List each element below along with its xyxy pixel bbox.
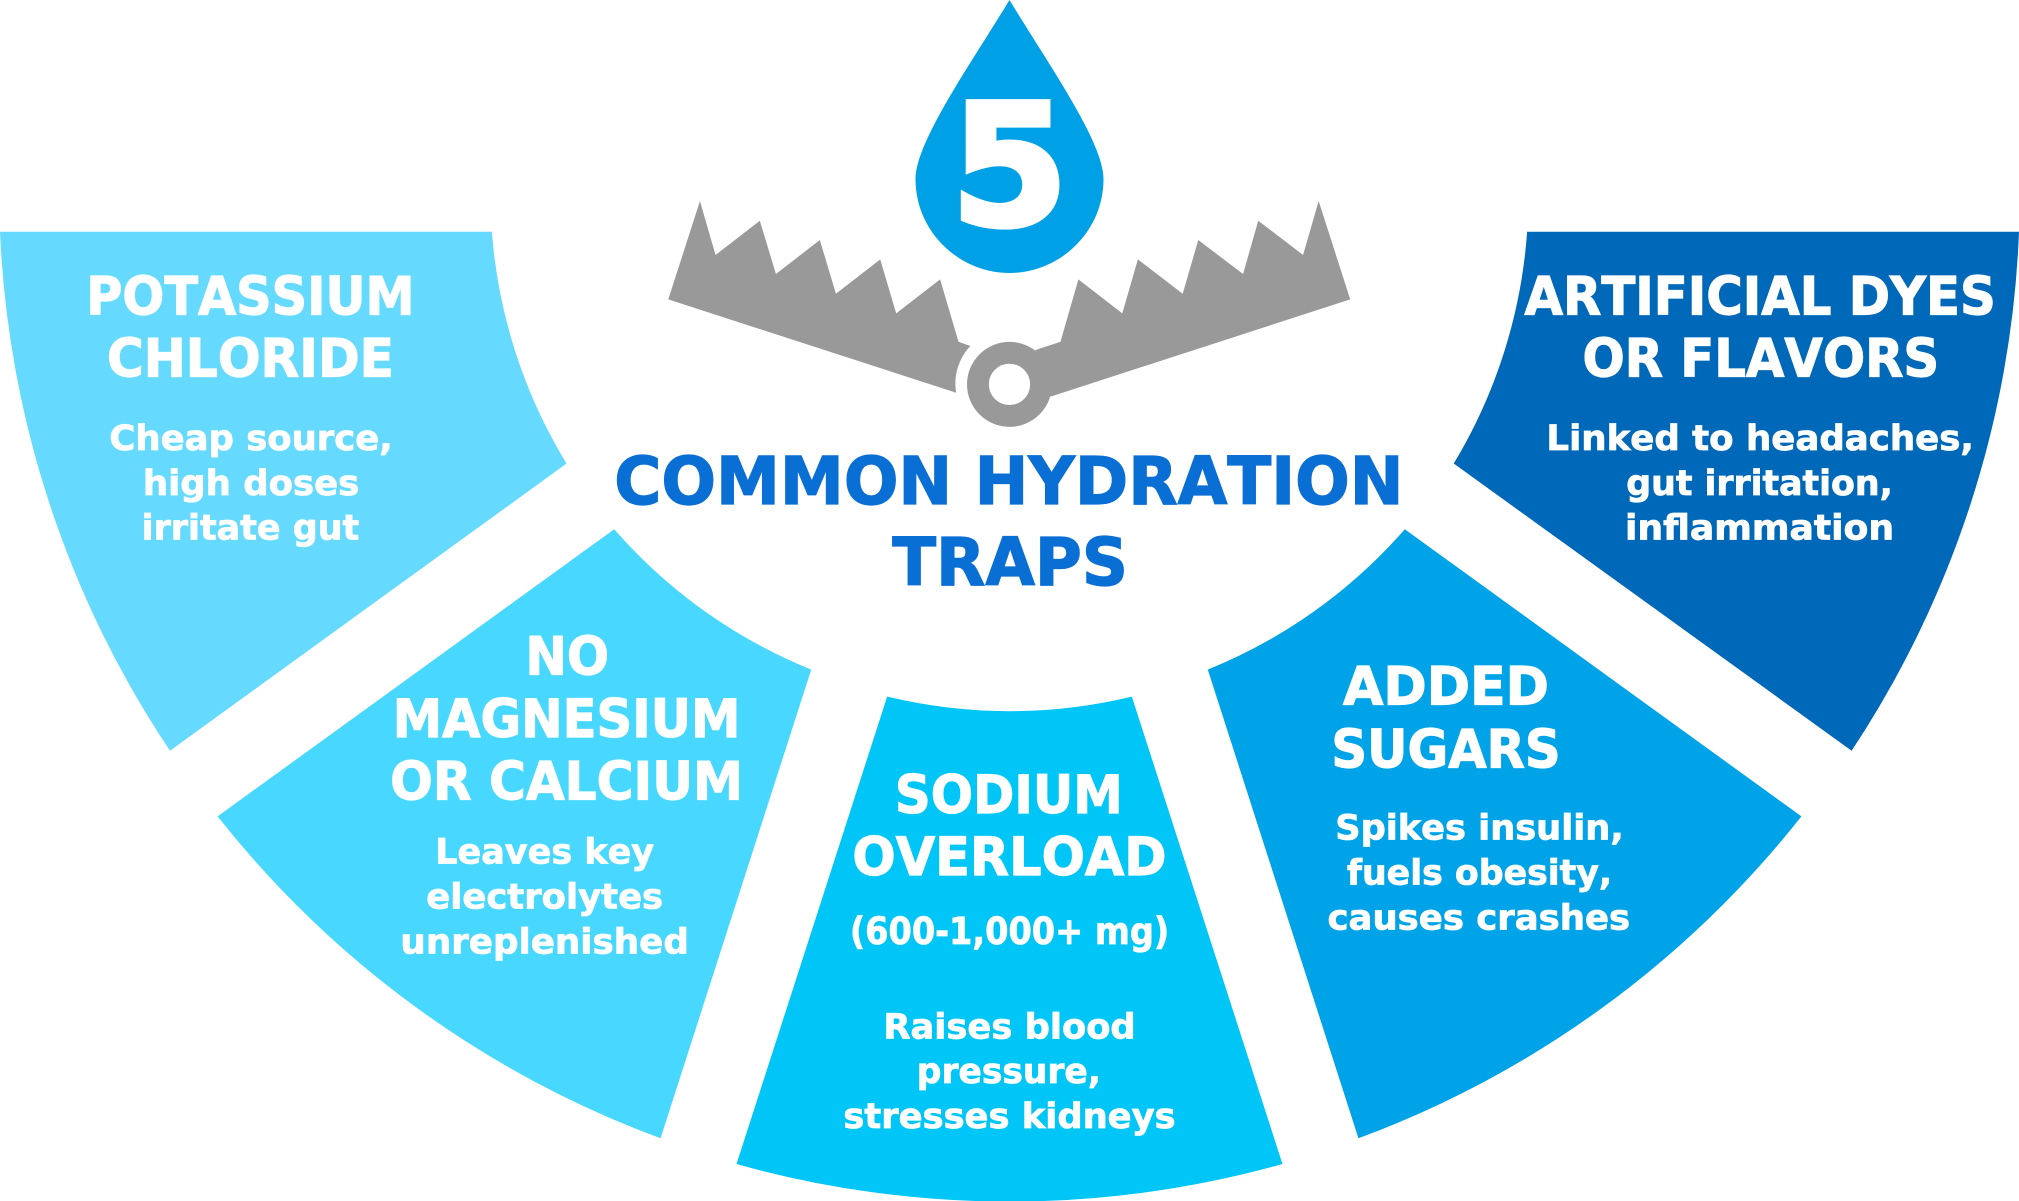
panel: artificial dyes or flavors [1454,232,2019,751]
heading: sodium overload [852,765,1167,888]
heading: added sugars: ADDED [1343,656,1549,717]
text: sodium overload description: Raises blood [883,1007,1136,1047]
text: sodium overload description: stresses kidneys [843,1097,1176,1137]
panel: added sugars [1208,529,1801,1138]
text: added sugars description: Spikes insulin, [1335,809,1624,849]
heading: sodium overload: OVERLOAD [852,827,1167,888]
trap hinge ring [978,353,1041,416]
text: sodium overload description [843,1007,1176,1137]
heading: no magnesium or calcium: NO [525,627,609,688]
text: artificial dyes or flavors description: gut irritation, [1626,464,1893,504]
heading: potassium chloride [86,267,415,389]
panel: potassium chloride [0,232,567,751]
heading: sodium overload: SODIUM [895,765,1123,826]
panel: sodium overload [737,697,1282,1201]
number 5: 5 [950,68,1069,265]
heading: potassium chloride: CHLORIDE [107,328,394,389]
text: added sugars description: causes crashes [1328,899,1630,939]
text: artificial dyes or flavors description: Linked to headaches, [1546,419,1974,459]
panel shape: sodium overload [737,697,1282,1201]
heading: no magnesium or calcium: MAGNESIUM [393,689,740,750]
trap right jaw [1036,201,1350,397]
text: no magnesium or calcium description: electrolytes [426,877,663,917]
text: potassium chloride description: Cheap source, [109,419,393,459]
text: potassium chloride description: high doses [143,464,359,504]
heading: artificial dyes or flavors: OR FLAVORS [1582,328,1939,389]
panel: no magnesium or calcium [218,529,811,1138]
heading: no magnesium or calcium [390,627,743,813]
text: sodium amount: (600-1,000+ mg) [850,909,1169,953]
title: COMMON HYDRATION [614,444,1404,520]
text: no magnesium or calcium description [400,832,689,963]
text: added sugars description: fuels obesity, [1347,854,1612,894]
text: sodium overload description: pressure, [917,1052,1101,1092]
heading: artificial dyes or flavors [1525,267,1996,389]
icon: water drop with number 5 [916,0,1103,273]
trap left jaw [668,201,970,393]
heading: artificial dyes or flavors: ARTIFICIAL DYES [1525,267,1996,328]
water drop [916,0,1103,273]
text: potassium chloride description: irritate gut [142,509,359,549]
text: no magnesium or calcium description: unreplenished [400,923,689,963]
heading: potassium chloride: POTASSIUM [86,267,415,328]
heading: no magnesium or calcium: OR CALCIUM [390,752,743,813]
panel shape: artificial dyes or flavors [1454,232,2019,751]
icon: bear trap [668,201,1350,416]
text: artificial dyes or flavors description: inflammation [1625,509,1894,549]
panel shape: no magnesium or calcium [218,529,811,1138]
panel shape: potassium chloride [0,232,567,751]
text: added sugars description [1328,809,1630,939]
text: no magnesium or calcium description: Leaves key [435,832,654,872]
text: artificial dyes or flavors description [1546,419,1974,549]
heading: added sugars: SUGARS [1331,719,1561,780]
title: TRAPS [892,525,1128,601]
panel shape: added sugars [1208,529,1801,1138]
title [614,444,1404,601]
heading: added sugars [1331,656,1561,780]
text: potassium chloride description [109,419,393,549]
